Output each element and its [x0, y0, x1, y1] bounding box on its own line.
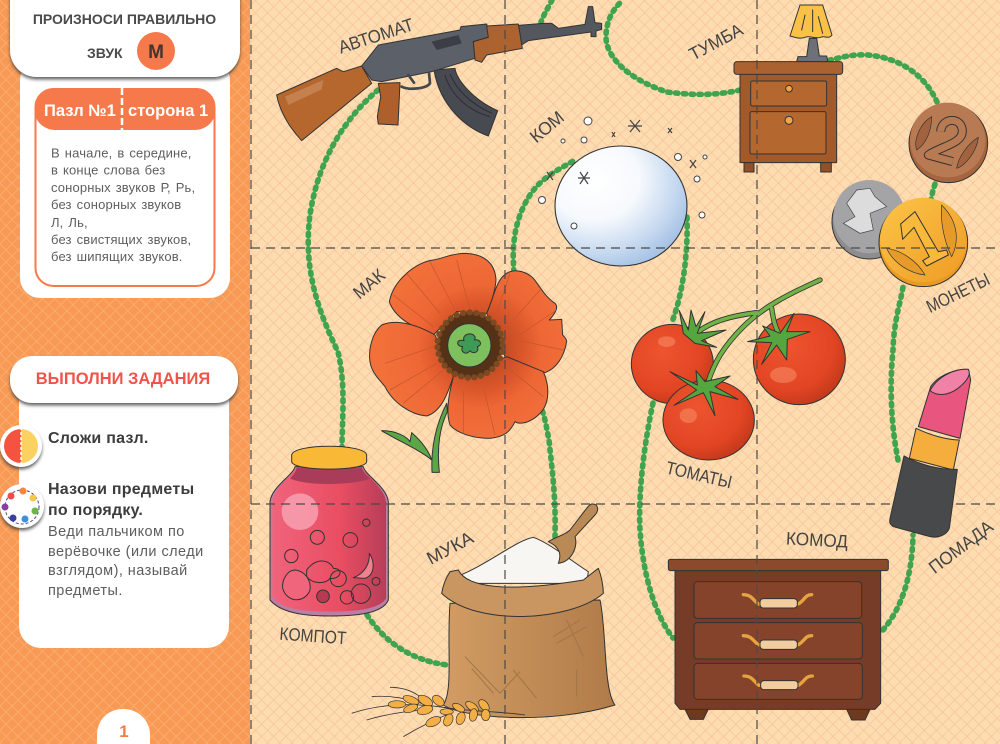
- jar highlight: [282, 493, 318, 530]
- tomato calyx left: [679, 310, 726, 347]
- rifle magazine: [434, 68, 498, 136]
- rules text: без свистящих звуков,: [51, 232, 191, 247]
- tab shape: [97, 709, 150, 744]
- puzzle background: [250, 0, 1000, 744]
- tomato bottom: [663, 380, 754, 460]
- task two title: [48, 481, 194, 519]
- icon: puzzle halves: [0, 425, 42, 467]
- tomato calyx bottom: [670, 371, 738, 416]
- sound badge: [137, 32, 175, 70]
- rules text: [51, 146, 195, 264]
- rifle grip: [377, 83, 400, 125]
- lamp shade lines: [802, 10, 823, 33]
- tomato right: [753, 314, 845, 405]
- sack rim: [442, 568, 603, 616]
- tasks heading: ВЫПОЛНИ ЗАДАНИЯ: [36, 370, 210, 388]
- chest handles: [743, 595, 812, 690]
- illustration: coins: [832, 103, 988, 287]
- jar liquid: [272, 467, 386, 612]
- lipstick gold collar: [909, 428, 959, 470]
- flour: [457, 537, 588, 583]
- task one: Сложи пазл.: [48, 430, 149, 447]
- puzzle number: Пазл №1: [44, 102, 116, 120]
- illustration: tomatoes: [631, 280, 845, 460]
- rifle dark slot: [432, 35, 462, 50]
- rifle handguard: [473, 24, 522, 62]
- orange sidebar background: [0, 0, 250, 744]
- chest body: [675, 571, 881, 709]
- rules text: В начале, в середине,: [51, 146, 192, 160]
- lamp shade: [790, 5, 832, 38]
- snow stars: [547, 120, 696, 184]
- poppy petals: [370, 253, 567, 438]
- lamp base: [797, 38, 828, 62]
- panel: tasks: [0, 356, 238, 648]
- beaded rope route: [308, 0, 937, 665]
- nightstand upper drawer: [751, 81, 827, 106]
- label: помада: ПОМАДА: [925, 516, 997, 578]
- label: тумба: ТУМБА: [686, 20, 746, 64]
- puzzle frame: [36, 89, 214, 286]
- panel: puzzle info card: [20, 60, 230, 298]
- two-ruble coin: [909, 103, 988, 183]
- rifle stock highlight: [285, 80, 323, 105]
- task two description: Веди пальчиком по: [48, 524, 185, 540]
- illustration: snowball: [538, 117, 707, 266]
- nightstand lower drawer: [750, 112, 826, 154]
- snow flakes: [538, 117, 707, 229]
- task two title: Назови предметы: [48, 481, 194, 498]
- task two description: взглядом), называй: [48, 563, 188, 579]
- label: автомат: АВТОМАТ: [336, 14, 416, 58]
- tomato vine: [698, 280, 820, 387]
- chest drawers: [694, 582, 862, 699]
- page number tab: [97, 709, 150, 744]
- wheat grains: [388, 693, 491, 729]
- illustration: chest of drawers: [668, 559, 888, 720]
- label: мак: МАК: [349, 265, 389, 303]
- illustration: nightstand with lamp: [734, 5, 843, 172]
- wheat stalks: [352, 687, 525, 737]
- sound letter: М: [148, 42, 164, 63]
- label: томаты: ТОМАТЫ: [664, 458, 734, 492]
- jar neck shade: [290, 467, 370, 484]
- nightstand body: [740, 74, 837, 163]
- sack weave: [465, 620, 587, 698]
- rules text: без сонорных звуков: [51, 197, 181, 212]
- illustration: flour sack with wheat: [352, 504, 615, 737]
- rifle barrel: [518, 7, 602, 45]
- header card: [10, 0, 240, 77]
- rules text: без шипящих звуков.: [51, 249, 183, 264]
- tasks heading pill: [10, 356, 238, 403]
- nightstand top: [734, 62, 843, 74]
- tasks card: [19, 375, 229, 648]
- silver coin: [832, 180, 907, 259]
- band divider: [121, 88, 123, 130]
- illustration: jar of compote: [270, 446, 388, 616]
- chest top: [668, 559, 888, 571]
- tomato left: [631, 324, 713, 404]
- poppy vein lines: [385, 260, 563, 435]
- page number: 1: [119, 722, 129, 741]
- poppy leaf: [382, 431, 432, 460]
- label: комод: КОМОД: [786, 528, 848, 552]
- lipstick case: [890, 456, 957, 537]
- card backing: [20, 60, 230, 298]
- icon: string of beads: [0, 484, 44, 528]
- rifle receiver: [362, 24, 490, 82]
- illustration: lipstick: [890, 369, 971, 537]
- rules text: сонорных звуков Р, Рь,: [51, 180, 195, 195]
- jar glass: [270, 467, 388, 616]
- rules text: Л, Ль,: [51, 215, 88, 230]
- task two description: верёвочке (или следи: [48, 544, 204, 560]
- puzzle cut lines: [251, 0, 1000, 744]
- wooden scoop: [548, 504, 598, 563]
- rifle magazine grooves: [445, 74, 492, 117]
- nightstand feet: [744, 163, 831, 172]
- label: компот: КОМПОТ: [279, 624, 347, 648]
- task two title: по порядку.: [48, 502, 143, 519]
- tomato calyx right: [748, 313, 810, 364]
- jar fruits: [283, 519, 380, 604]
- label: мука: МУКА: [423, 527, 477, 569]
- task two description: [48, 524, 204, 599]
- rifle trigger guard: [402, 73, 430, 89]
- one-ruble coin: [879, 198, 968, 287]
- lipstick bullet top: [930, 369, 969, 395]
- jar lid: [292, 446, 367, 469]
- puzzle title band: [35, 88, 215, 130]
- poppy centre stamens: [437, 312, 503, 378]
- illustration: rifle: [277, 7, 602, 141]
- poppy seed pod: [448, 324, 491, 367]
- panel: header: [10, 0, 240, 77]
- poppy pod flower mark: [458, 334, 481, 353]
- snowball body: [555, 146, 687, 266]
- rules text: в конце слова без: [51, 162, 165, 178]
- drawer knobs: [786, 85, 792, 92]
- illustration: poppy: [370, 253, 567, 472]
- tomato highlights: [658, 336, 797, 423]
- object labels: [279, 14, 997, 648]
- poppy stem: [432, 403, 447, 472]
- lipstick bullet: [918, 369, 971, 438]
- sound word: ЗВУК: [87, 45, 123, 61]
- puzzle side: сторона 1: [128, 102, 208, 120]
- label: ком: КОМ: [526, 107, 568, 147]
- task two description: предметы.: [48, 583, 123, 599]
- heading: ПРОИЗНОСИ ПРАВИЛЬНО: [33, 11, 216, 27]
- rifle stock: [277, 66, 372, 141]
- chest feet: [685, 709, 870, 720]
- sack body: [443, 600, 615, 718]
